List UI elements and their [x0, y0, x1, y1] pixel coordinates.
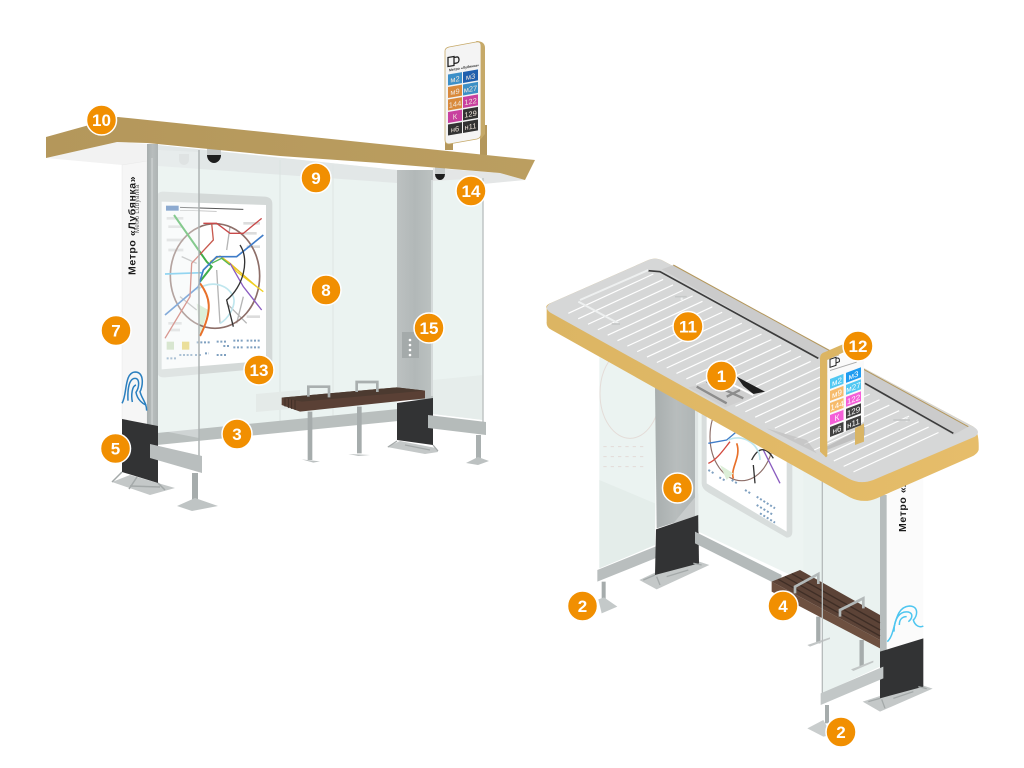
element 15: button panel: [402, 332, 419, 358]
callout 9: 9: [311, 169, 321, 188]
wave logo: [122, 372, 147, 411]
right shelter: rear top view: м9: [832, 388, 842, 400]
callout 7: 7: [111, 322, 121, 340]
left glass panel and rail: [597, 348, 660, 613]
element 12: rear sign on roof: [820, 343, 865, 457]
element 14: camera right: [435, 166, 445, 180]
right column with black base: [387, 170, 438, 454]
front glass tint: [803, 470, 880, 693]
element 3: back rail: [157, 409, 398, 445]
roof mounting bars: [578, 270, 907, 422]
element 12: top sign, left shelter: м27: [464, 84, 477, 95]
callout 2 right: [826, 717, 856, 747]
right shelter: rear top view: м3: [849, 369, 859, 382]
callout 11: [673, 312, 703, 342]
callout 14: 14: [462, 182, 481, 201]
back glass wall: [158, 145, 397, 434]
sign stop name: Метро «Лубянка»: [449, 63, 479, 72]
bench: [282, 382, 425, 463]
element 6: column: [639, 387, 709, 589]
back glass, rail and poster: [695, 393, 822, 590]
callout 7: [101, 316, 131, 346]
element 5: black pillar base: [112, 419, 175, 495]
element 12: top sign, left shelter: м2: [450, 74, 460, 85]
element 12: top sign, left shelter: 144: [449, 99, 461, 110]
pillar station name: Метро «Лубянка»: [126, 176, 138, 275]
element 10: roof edge: [46, 117, 535, 180]
right shelter: rear top view: К: [835, 413, 839, 423]
element 4: bench: [772, 570, 880, 671]
callout 11: 11: [679, 318, 697, 336]
side glass panel and rail: [428, 178, 489, 465]
right shelter: rear top view: н6: [833, 424, 842, 436]
callout 6: 6: [673, 479, 682, 498]
poster with city map: [157, 192, 272, 377]
element 12: top sign, left shelter: 122: [464, 96, 477, 107]
element 12: top sign, left shelter: [445, 41, 487, 155]
element 12: top sign, left shelter: К: [453, 112, 458, 122]
element 12: top sign, left shelter: 129: [464, 109, 477, 120]
right shelter: rear top view: 129: [847, 405, 861, 419]
element 1: roof hatch opening: [688, 377, 823, 457]
element 12: top sign, left shelter: н11: [465, 121, 476, 132]
callout 2 left: [568, 591, 598, 621]
wave logo: [887, 606, 923, 642]
callout 15: 15: [420, 319, 438, 338]
right shelter: rear top view: н11: [847, 417, 860, 430]
callout 13: 13: [250, 361, 268, 380]
element 12: top sign, left shelter: н6: [451, 124, 459, 134]
callout 14: [456, 176, 486, 206]
callout 15: [414, 313, 444, 343]
front glass edge and rail: [807, 477, 883, 737]
numbered callouts: [86, 105, 873, 747]
callout 3: [222, 419, 252, 449]
right poster: [702, 393, 792, 538]
right shelter: rear top view: 122: [847, 393, 861, 407]
ceiling underside: [46, 142, 525, 184]
element 7: left pillar panel: [122, 144, 158, 426]
callout 6: [662, 473, 692, 503]
pillar station name: Метро «Лубянка»: [897, 433, 909, 532]
callout 4: 4: [778, 597, 788, 616]
camera left: [179, 148, 221, 165]
right shelter: rear top view: м27: [846, 380, 861, 395]
element 12: top sign, left shelter: м3: [466, 71, 475, 82]
callout 3: 3: [232, 425, 242, 444]
left shelter: front view: [46, 41, 535, 511]
callout 1: [706, 361, 736, 391]
callout 8: [311, 275, 341, 305]
callout 2 right: 2: [836, 723, 846, 742]
callout 5: 5: [111, 440, 120, 458]
callout 1: 1: [717, 367, 726, 386]
callout 4: [768, 591, 798, 621]
callout 8: 8: [321, 281, 331, 300]
pillar station name latin: Metro Lubyanka: [135, 184, 141, 233]
callout 12: [843, 331, 873, 361]
callout 12: 12: [849, 337, 867, 356]
callout 13: [244, 355, 274, 385]
front glass and rail: [150, 150, 218, 511]
right shelter: rear top view: [546, 259, 979, 737]
element 11: roof: [546, 259, 979, 501]
callout 10: 10: [92, 111, 111, 130]
callout 2 left: 2: [578, 597, 587, 616]
sign transit logo: [448, 56, 459, 66]
element 12: top sign, left shelter: м9: [450, 87, 460, 97]
callout 5: [100, 434, 130, 464]
right shelter: rear top view: м2: [832, 376, 842, 388]
right shelter: rear top view: 144: [830, 399, 844, 413]
right white pillar with base: [863, 475, 933, 712]
callout 10: [86, 105, 116, 135]
roof slats: [568, 274, 938, 472]
callout 9: [301, 163, 331, 193]
